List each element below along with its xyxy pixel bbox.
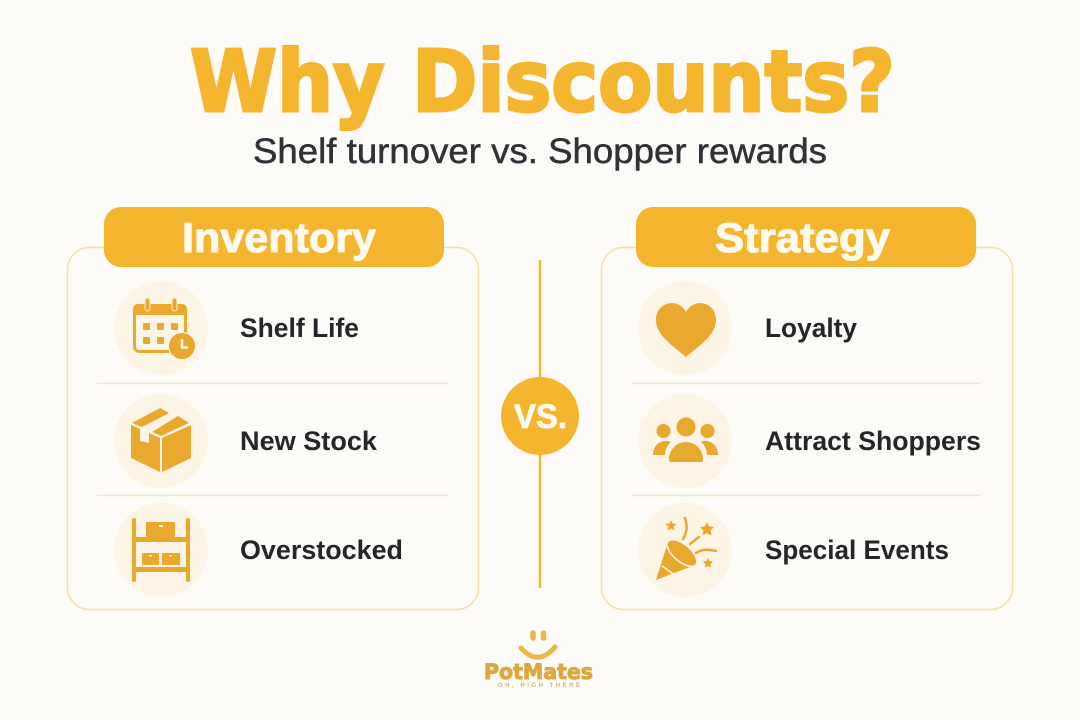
panel: inventory — [68, 207, 478, 610]
icon: calendar with clock — [114, 281, 208, 375]
strategy header — [636, 207, 976, 267]
vs badge: VS. — [514, 398, 567, 436]
label: attract shoppers: Attract Shoppers — [765, 426, 981, 456]
row: special events — [638, 503, 949, 597]
row: attract shoppers — [638, 394, 981, 488]
row: new stock — [114, 394, 378, 488]
label: overstocked: Overstocked — [240, 535, 403, 565]
strategy header: Strategy — [715, 214, 891, 261]
row: overstocked — [114, 503, 403, 597]
row: shelf life — [114, 281, 359, 375]
icon: smiley — [521, 633, 555, 657]
label: special events: Special Events — [765, 535, 949, 565]
label: new stock: New Stock — [240, 426, 378, 456]
tagline: OH, HIGH THERE — [498, 683, 580, 689]
inventory header — [104, 207, 444, 267]
wordmark: PotMates — [484, 660, 593, 684]
panel: strategy — [602, 207, 1012, 610]
icon: box — [114, 394, 208, 488]
title: Why Discounts? — [190, 33, 895, 132]
divider line — [539, 260, 541, 588]
icon: party popper — [638, 503, 732, 597]
label: shelf life: Shelf Life — [240, 313, 359, 343]
vs badge — [501, 377, 579, 455]
logo: PotMates — [484, 633, 593, 689]
icon: heart — [638, 281, 732, 375]
icon: people — [638, 394, 732, 488]
inventory header: Inventory — [182, 214, 377, 261]
icon: shelf — [114, 503, 208, 597]
label: loyalty: Loyalty — [765, 313, 857, 343]
row: loyalty — [638, 281, 857, 375]
subtitle: Shelf turnover vs. Shopper rewards — [253, 132, 827, 171]
